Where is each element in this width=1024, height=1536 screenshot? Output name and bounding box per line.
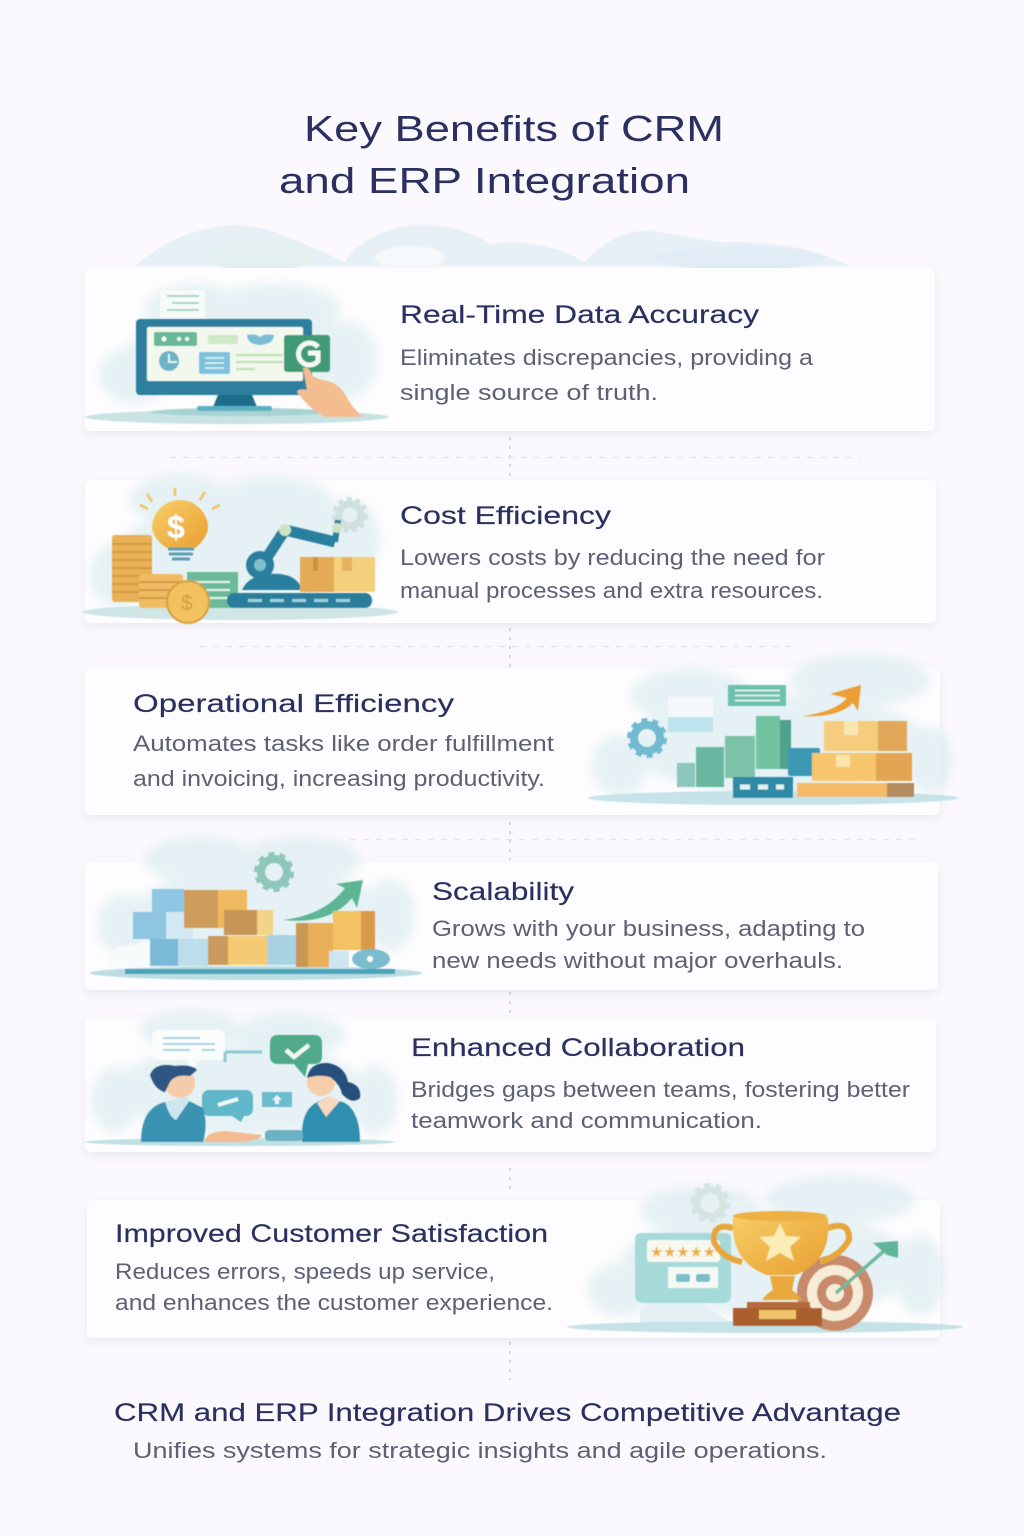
text block xyxy=(411,1077,910,1133)
heading: CRM and ERP Integration Drives Competitive Advantage xyxy=(114,1399,901,1427)
panel: real-time data accuracy xyxy=(85,268,935,431)
heading: Cost Efficiency xyxy=(400,502,612,530)
heading: title: and ERP Integration xyxy=(279,160,690,201)
text block: Eliminates discrepancies, providing a xyxy=(400,345,814,370)
icon: trophy and target xyxy=(567,1176,963,1333)
text block: single source of truth. xyxy=(400,380,658,405)
text block xyxy=(432,916,865,973)
icon: trophy and target: ★★★★★ xyxy=(650,1244,716,1261)
heading: Operational Efficiency xyxy=(133,690,455,718)
text block: new needs without major overhauls. xyxy=(432,948,843,973)
text block xyxy=(115,1259,553,1315)
heading: Improved Customer Satisfaction xyxy=(115,1220,548,1248)
icon: coins, lightbulb and robot arm: $ xyxy=(167,509,185,545)
heading: Real-Time Data Accuracy xyxy=(400,301,760,329)
panel: cost efficiency xyxy=(82,474,936,623)
icon: two people talking xyxy=(85,1010,397,1146)
connectors xyxy=(170,437,920,1380)
heading: Enhanced Collaboration xyxy=(411,1034,745,1062)
text block: Lowers costs by reducing the need for xyxy=(400,545,825,570)
heading: title xyxy=(279,108,724,201)
panel: enhanced collaboration xyxy=(85,1010,936,1152)
text block xyxy=(133,731,554,791)
text block: Reduces errors, speeds up service, xyxy=(115,1259,495,1284)
text block xyxy=(400,345,814,405)
panel: improved customer satisfaction xyxy=(87,1176,963,1338)
panel: operational efficiency xyxy=(85,654,958,815)
icon: buildings, boxes and rising arrow xyxy=(588,654,958,805)
icon: coins, lightbulb and robot arm: $ xyxy=(181,592,193,615)
text block: teamwork and communication. xyxy=(411,1108,762,1133)
text block: Unifies systems for strategic insights and agile operations. xyxy=(133,1438,827,1463)
text block: manual processes and extra resources. xyxy=(400,578,823,603)
conclusion xyxy=(114,1399,901,1463)
text block: and enhances the customer experience. xyxy=(115,1290,553,1315)
heading: Scalability xyxy=(432,878,575,906)
text block: Automates tasks like order fulfillment xyxy=(133,731,554,756)
icon: stacked boxes with growth arrow xyxy=(90,836,422,980)
text block: and invoicing, increasing productivity. xyxy=(133,766,545,791)
text block xyxy=(400,545,825,603)
icon: coins, lightbulb and robot arm xyxy=(82,474,398,623)
icon: monitor with touch button xyxy=(85,284,389,424)
panel: scalability xyxy=(85,836,938,990)
text block: Grows with your business, adapting to xyxy=(432,916,865,941)
decorative cloud band xyxy=(135,224,850,272)
text block: Bridges gaps between teams, fostering better xyxy=(411,1077,910,1102)
heading: title: Key Benefits of CRM xyxy=(304,108,724,149)
